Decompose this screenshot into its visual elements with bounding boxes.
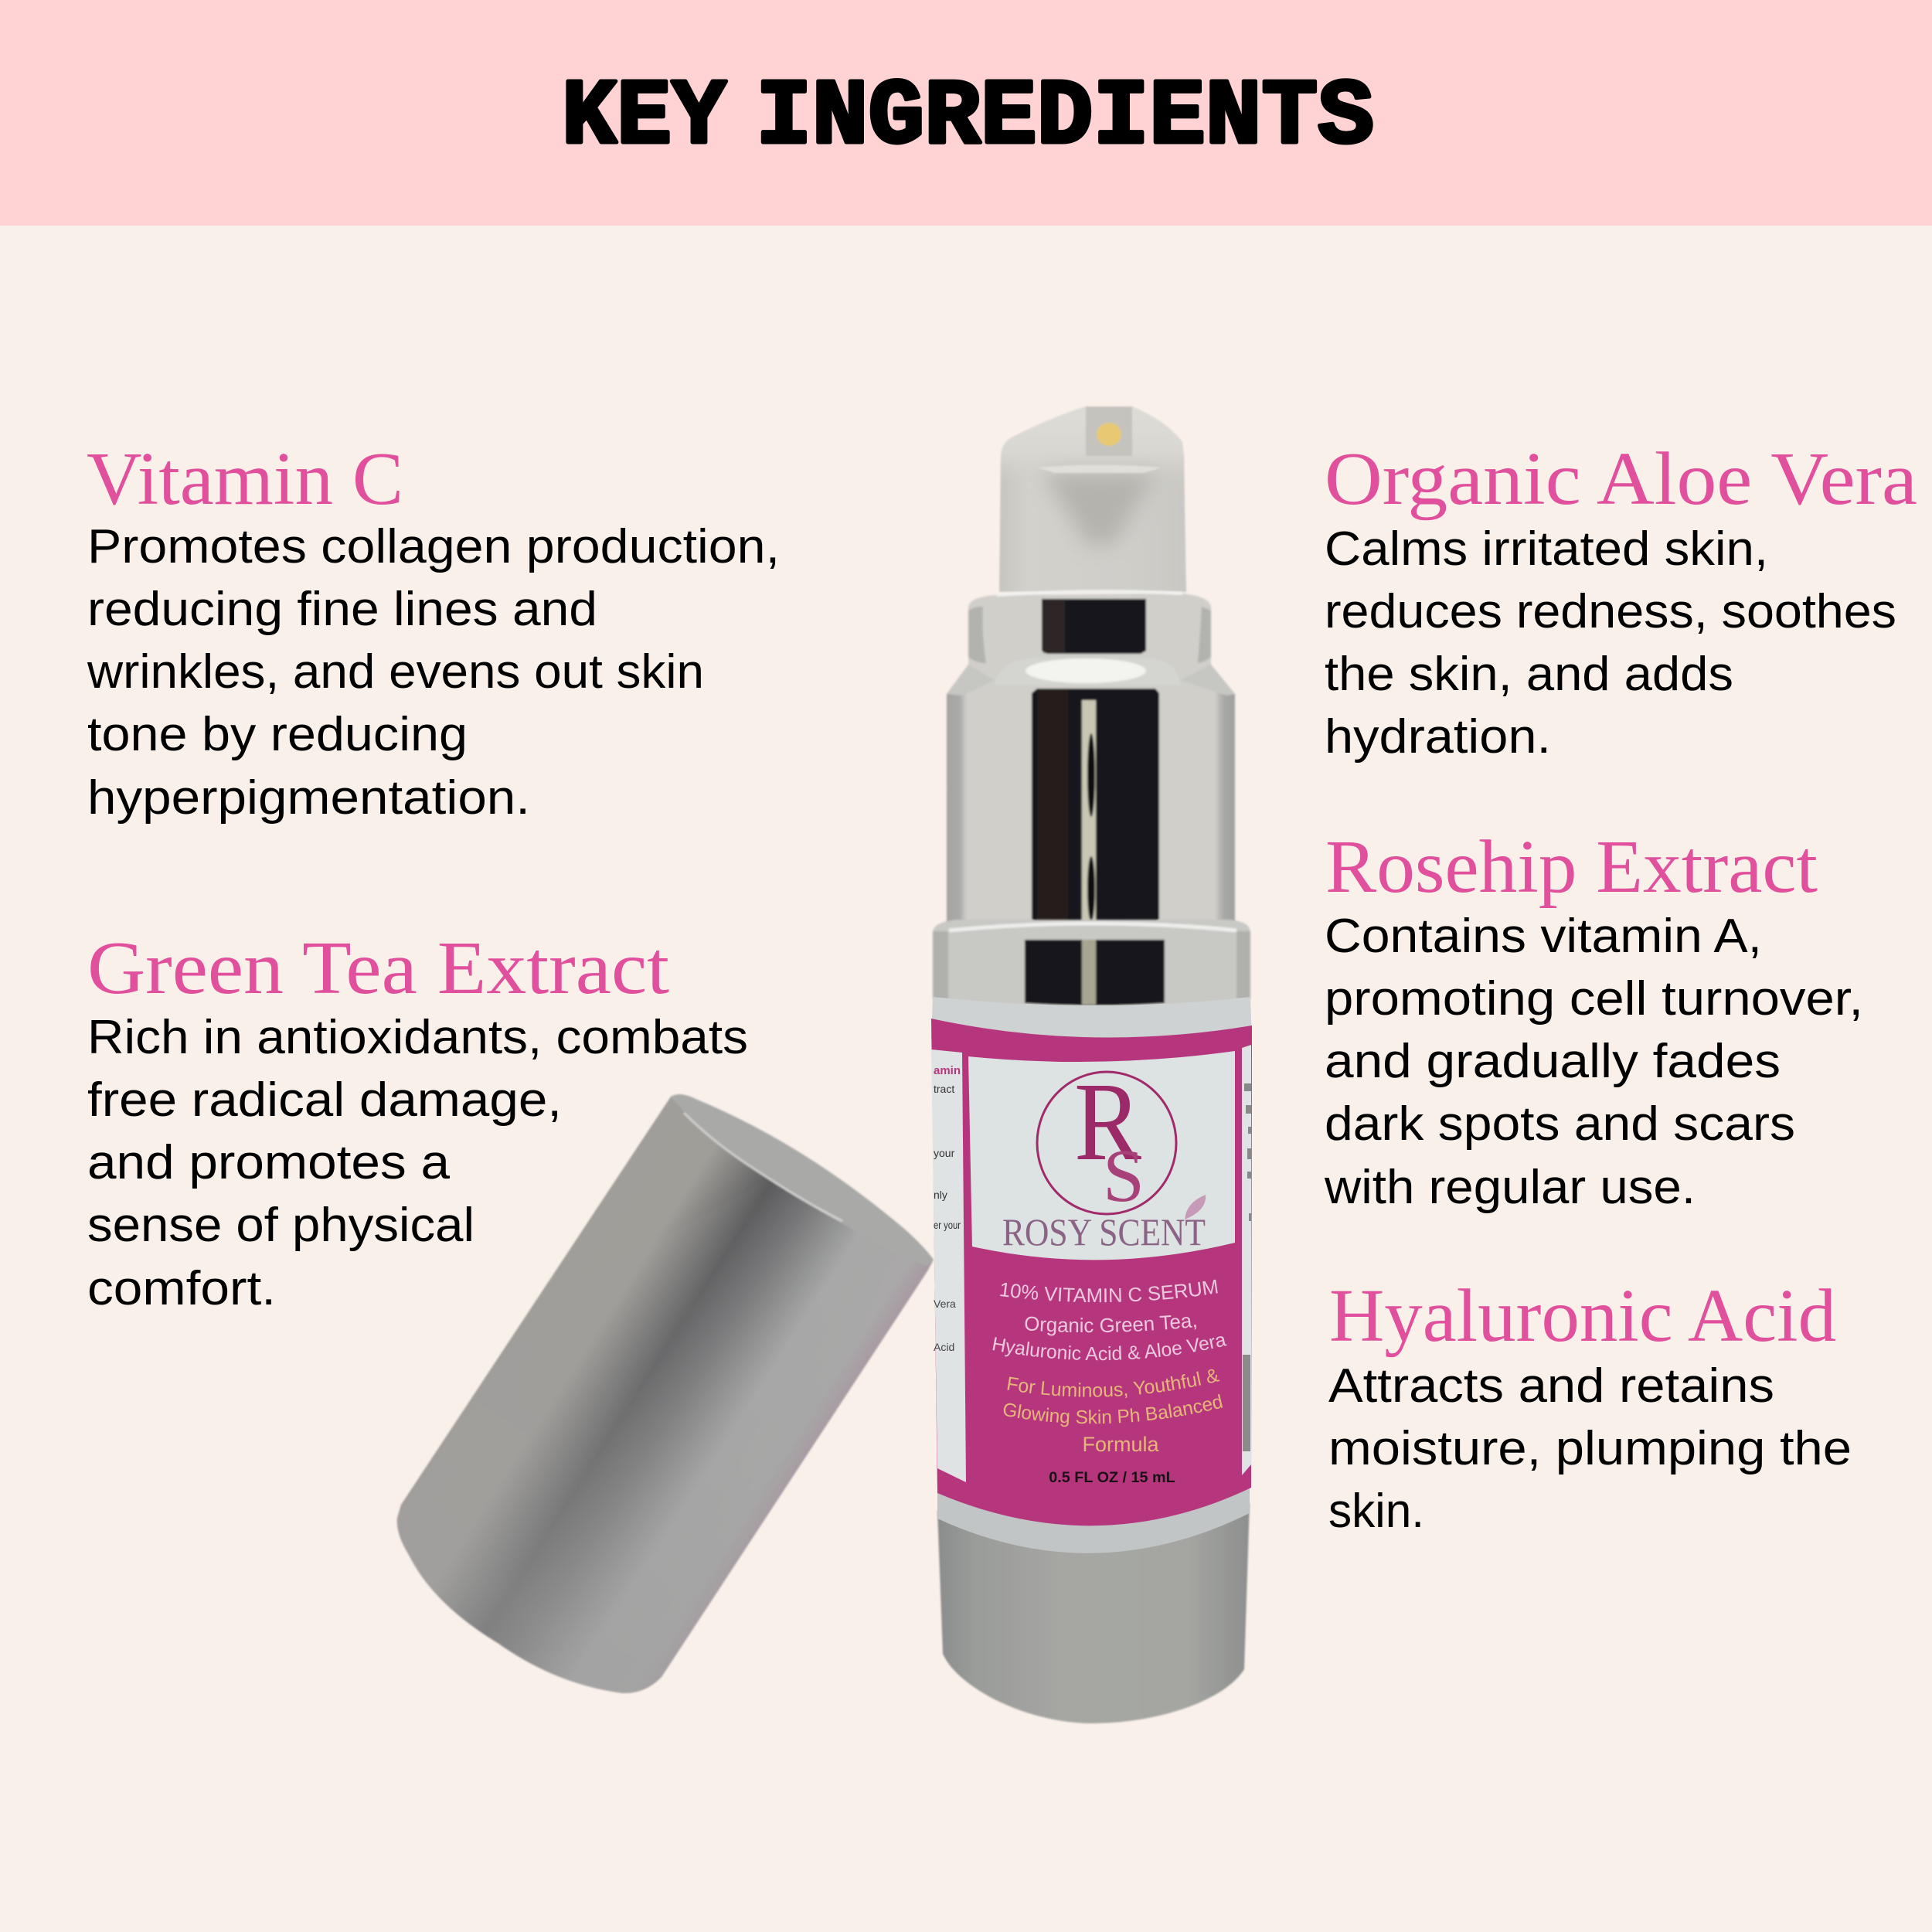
- bottle pale band below label: [937, 1488, 1250, 1553]
- panel: Green Tea Extract: [87, 927, 748, 1315]
- left side panel of label: nly: [934, 1189, 947, 1201]
- text block: Hyaluronic Acid description: skin.: [1328, 1485, 1424, 1538]
- label text: product name and benefits: [992, 1280, 1227, 1486]
- label text: product name and benefits: Formula: [1082, 1433, 1159, 1456]
- label text: product name and benefits: Organic Green Tea,: [1025, 1315, 1196, 1335]
- logo: Rosy Scent monogram: R: [1074, 1060, 1141, 1184]
- label text: product name and benefits: 10% VITAMIN C SERUM: [1000, 1280, 1218, 1303]
- text block: Aloe Vera description: Calms irritated skin,: [1325, 522, 1768, 576]
- text block: Rosehip description: dark spots and scars: [1325, 1097, 1795, 1151]
- heading: Green Tea Extract: Green Tea Extract: [87, 927, 669, 1009]
- text block: Rosehip description: promoting cell turnover,: [1325, 972, 1863, 1026]
- bottle pale band above label: [931, 997, 1252, 1039]
- text block: Green Tea description: and promotes a: [87, 1136, 451, 1189]
- label text: product name and benefits: For Luminous, Youthful &: [1007, 1369, 1219, 1399]
- white logo panel: [968, 1051, 1235, 1260]
- left side panel of label: er your: [934, 1219, 961, 1231]
- heading: Organic Aloe Vera: Organic Aloe Vera: [1325, 437, 1917, 520]
- text block: Green Tea description: sense of physical: [87, 1199, 474, 1252]
- text block: Hyaluronic Acid description: Attracts and retains: [1328, 1359, 1774, 1413]
- bottle pump head: [999, 406, 1186, 592]
- logo: Rosy Scent monogram: S: [1103, 1134, 1145, 1218]
- panel: Organic Aloe Vera: [1325, 437, 1917, 764]
- text block: Aloe Vera description: hydration.: [1325, 710, 1551, 764]
- text block: Vitamin C description: wrinkles, and evens out skin: [87, 645, 704, 699]
- panel: Vitamin C: [87, 437, 780, 825]
- text block: Vitamin C description: reducing fine lines and: [87, 583, 597, 636]
- left side panel of label: [931, 1049, 972, 1482]
- text block: Aloe Vera description: [1325, 522, 1896, 764]
- bottle upper collar: [947, 591, 1235, 927]
- left side panel of label: tract: [934, 1083, 954, 1095]
- text block: Vitamin C description: tone by reducing: [87, 708, 468, 761]
- text block: Vitamin C description: Promotes collagen production,: [87, 520, 780, 573]
- panel: Rosehip Extract: [1324, 825, 1863, 1214]
- serum bottle: [931, 406, 1252, 1725]
- text block: Vitamin C description: [87, 520, 780, 825]
- bottle base: [937, 1503, 1250, 1723]
- label text: product name and benefits: 0.5 FL OZ / 15 mL: [1049, 1469, 1175, 1486]
- text block: Vitamin C description: hyperpigmentation.: [87, 771, 530, 825]
- text block: Green Tea description: Rich in antioxidants, combats: [87, 1011, 748, 1064]
- title: KEY: [562, 66, 726, 171]
- logo: Rosy Scent monogram: ROSY SCENT: [1002, 1210, 1206, 1253]
- text block: Rosehip description: [1324, 910, 1863, 1214]
- left side panel of label: Acid: [934, 1341, 954, 1353]
- text block: Hyaluronic Acid description: [1328, 1359, 1852, 1538]
- label text: product name and benefits: Hyaluronic Acid & Aloe Vera: [992, 1336, 1227, 1360]
- heading: Rosehip Extract: Rosehip Extract: [1325, 825, 1818, 908]
- text block: Rosehip description: with regular use.: [1324, 1161, 1696, 1214]
- panel: Hyaluronic Acid: [1328, 1274, 1852, 1538]
- text block: Aloe Vera description: the skin, and adds: [1325, 648, 1733, 701]
- product label: [931, 1019, 1252, 1526]
- bottle cap: [397, 1094, 934, 1693]
- left side panel of label: amin C: [934, 1064, 972, 1077]
- title: INGREDIENTS: [756, 66, 1374, 171]
- text block: Hyaluronic Acid description: moisture, plumping the: [1328, 1422, 1852, 1475]
- heading: Hyaluronic Acid: Hyaluronic Acid: [1329, 1274, 1836, 1357]
- label text: product name and benefits: Glowing Skin Ph Balanced: [1003, 1394, 1223, 1427]
- text block: Rosehip description: Contains vitamin A,: [1325, 910, 1762, 963]
- text block: Green Tea description: comfort.: [87, 1262, 276, 1315]
- right side panel of label with barcode: [1242, 1045, 1251, 1475]
- header band: [0, 0, 1932, 226]
- logo: Rosy Scent monogram: [1002, 1060, 1206, 1253]
- bottle lower collar: [933, 920, 1250, 1009]
- text block: Rosehip description: and gradually fades: [1325, 1035, 1781, 1088]
- text block: Green Tea description: [87, 1011, 748, 1315]
- text block: Aloe Vera description: reduces redness, soothes: [1325, 585, 1896, 638]
- text block: Green Tea description: free radical damage,: [87, 1073, 562, 1127]
- heading: Vitamin C: Vitamin C: [87, 437, 403, 520]
- left side panel of label: your: [934, 1147, 955, 1159]
- left side panel of label: Vera: [934, 1298, 956, 1310]
